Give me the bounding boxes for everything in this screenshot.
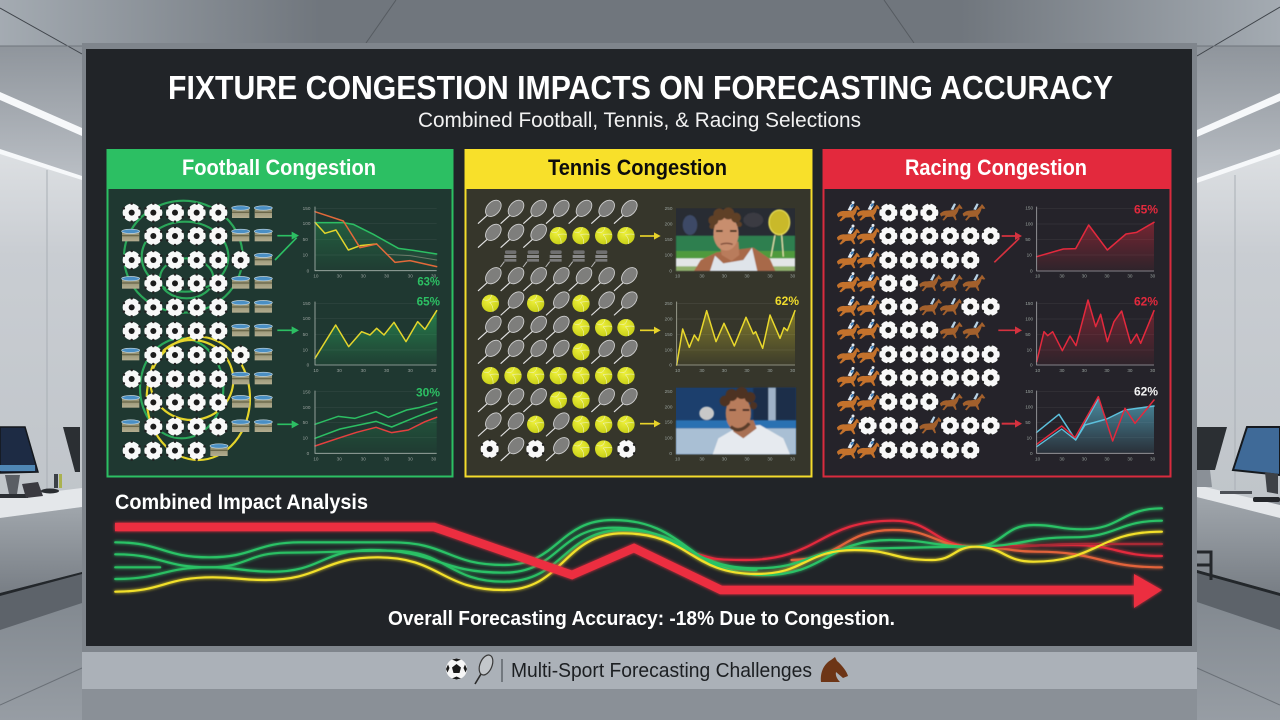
- tennis axis labels 1: 30: [767, 274, 773, 279]
- football area chart 2: 30: [361, 368, 366, 373]
- football area chart 2: 30: [337, 368, 342, 373]
- football area chart 2: 100: [303, 316, 311, 321]
- red decline arrow: [115, 527, 1162, 608]
- racing chart 1: 30: [1104, 274, 1110, 279]
- tennis icon grid: [478, 197, 640, 461]
- football line chart 3: 10: [313, 456, 319, 461]
- racing chart 2: 150: [1025, 301, 1034, 306]
- tennis area chart: 200: [665, 317, 673, 322]
- racing chart 3: 150: [1025, 389, 1034, 394]
- football line chart 1: 30: [384, 274, 390, 279]
- racing chart 1: 10: [1035, 274, 1041, 279]
- tennis axis labels 2: 100: [665, 435, 673, 440]
- bottom footer strip: [82, 652, 1197, 689]
- tennis axis labels 1: 30: [790, 274, 796, 279]
- football line chart 1: 50: [303, 237, 308, 242]
- panel: racing congestion: [823, 149, 1171, 476]
- tennis axis labels 2: 30: [699, 456, 705, 461]
- racing chart 3: 100: [1025, 405, 1034, 410]
- racing chart 2: 0: [1030, 363, 1033, 368]
- tennis area chart: 100: [665, 348, 673, 353]
- racing chart 1: 50: [1025, 237, 1031, 242]
- racing chart 2: 10: [1035, 368, 1041, 373]
- racing chart 2: 30: [1104, 368, 1110, 373]
- tennis axis labels 2: 10: [675, 456, 681, 461]
- tennis axis labels 2: 30: [722, 456, 727, 461]
- racing chart 3: 10: [1035, 456, 1041, 461]
- combined impact wave chart: [115, 508, 1162, 592]
- tennis axis labels 1: 250: [665, 206, 673, 211]
- football line chart 3: 30: [361, 456, 366, 461]
- racing chart 1: 65%: [1134, 202, 1158, 216]
- football area chart 2: 10: [313, 368, 319, 373]
- tennis axis labels 1: 10: [675, 274, 681, 279]
- football area chart 2: 65%: [417, 294, 440, 308]
- tennis axis labels 2: 30: [744, 456, 750, 461]
- racing chart 1: 10: [1027, 253, 1032, 258]
- football line chart 1: 0: [307, 268, 310, 273]
- tennis area chart: 30: [722, 368, 727, 373]
- racing chart 3: 50: [1025, 420, 1031, 425]
- tennis area chart: 30: [790, 368, 796, 373]
- tennis area chart: 30: [699, 368, 705, 373]
- tennis axis labels 1: [665, 206, 796, 279]
- racing chart 1: 30: [1127, 274, 1133, 279]
- tennis axis labels 1: 30: [744, 274, 750, 279]
- icon: football: [446, 658, 467, 680]
- racing chart 3: 30: [1104, 456, 1110, 461]
- icon: racket: [475, 653, 495, 684]
- football line chart 1: 100: [303, 221, 311, 226]
- footer: [446, 653, 848, 684]
- racing panel heading: [823, 149, 1171, 189]
- racing chart 2: 30: [1127, 368, 1133, 373]
- football line chart 1: [303, 206, 440, 288]
- racing chart 2: 30: [1150, 368, 1156, 373]
- racing panel heading: Racing Congestion: [905, 155, 1087, 180]
- overall accuracy callout: Overall Forecasting Accuracy: -18% Due to Congestion.: [388, 608, 895, 630]
- display board dark screen: [86, 49, 1192, 646]
- racing chart 2: 10: [1027, 348, 1032, 353]
- subtitle: Combined Football, Tennis, & Racing Selections: [418, 109, 861, 132]
- racing chart 2: 30: [1082, 368, 1087, 373]
- football line chart 1: 10: [313, 274, 319, 279]
- football line chart 3: 10: [303, 435, 308, 440]
- tennis axis labels 1: 150: [665, 237, 673, 242]
- tennis axis labels 2: 30: [790, 456, 796, 461]
- racing chart 3: 30: [1082, 456, 1087, 461]
- football line chart 1: 30: [408, 274, 413, 279]
- racing chart 1: 150: [1025, 206, 1034, 211]
- tennis area chart: 10: [675, 368, 681, 373]
- football line chart 3: 100: [303, 405, 311, 410]
- football area chart 2: 10: [303, 348, 308, 353]
- racing chart 3: 0: [1030, 451, 1033, 456]
- footer text: Multi-Sport Forecasting Challenges: [511, 660, 812, 682]
- tennis axis labels 1: 30: [699, 274, 705, 279]
- tennis panel heading: [465, 149, 812, 189]
- racing chart 1: 30: [1150, 274, 1156, 279]
- football line chart 1: 30: [337, 274, 342, 279]
- football line chart 3: 30: [337, 456, 342, 461]
- football line chart 1: 30: [361, 274, 366, 279]
- panel: football congestion: [107, 149, 453, 476]
- racing chart 3: 30: [1127, 456, 1133, 461]
- racing chart 2: 100: [1025, 317, 1034, 322]
- tennis axis labels 2: [665, 389, 796, 461]
- tennis axis labels 2: 0: [669, 451, 672, 456]
- football line chart 3: 150: [303, 389, 311, 394]
- tennis axis labels 1: 30: [722, 274, 727, 279]
- tennis area chart: 250: [665, 301, 673, 306]
- football area chart 2: 30: [408, 368, 413, 373]
- football line chart 3: 30%: [416, 385, 440, 399]
- football icon grid with congestion loops: [122, 201, 272, 461]
- racing chart 3: 30: [1150, 456, 1156, 461]
- tennis axis labels 1: 200: [665, 222, 673, 227]
- tennis player photo 1: [676, 207, 795, 271]
- tennis axis labels 2: 30: [767, 456, 773, 461]
- football line chart 3: 0: [307, 451, 310, 456]
- racing chart 2: 62%: [1134, 294, 1158, 308]
- title: FIXTURE CONGESTION IMPACTS ON FORECASTING ACCURACY: [168, 70, 1113, 107]
- football area chart 2: [303, 294, 440, 373]
- football arrows: [275, 232, 299, 428]
- racing chart 1: 30: [1059, 274, 1065, 279]
- tennis axis labels 1: 100: [665, 253, 673, 258]
- football line chart 3: 50: [303, 420, 308, 425]
- tennis area chart: 62%: [775, 294, 799, 308]
- football line chart 3: 30: [431, 456, 437, 461]
- racing chart 1: 30: [1082, 274, 1087, 279]
- tennis axis labels 2: 150: [665, 420, 673, 425]
- football area chart 2: 50: [303, 332, 308, 337]
- tennis area chart: 0: [669, 363, 672, 368]
- football area chart 2: 30: [431, 368, 437, 373]
- football line chart 1: 63%: [417, 274, 440, 288]
- tennis area chart: [665, 294, 799, 373]
- football line chart 3: 30: [408, 456, 413, 461]
- tennis area chart: 30: [744, 368, 750, 373]
- football line chart 1: 150: [303, 206, 311, 211]
- racing chart 2: [1025, 294, 1158, 373]
- racing icon grid: [837, 200, 1000, 460]
- racing chart 1: 100: [1025, 221, 1034, 226]
- football panel heading: Football Congestion: [182, 155, 376, 180]
- tennis arrows: [640, 232, 661, 427]
- football line chart 3: [303, 385, 440, 461]
- panel: tennis congestion: [465, 149, 812, 476]
- racing chart 3: 62%: [1134, 385, 1158, 399]
- racing arrows: [994, 232, 1022, 428]
- racing chart 3: 10: [1027, 435, 1032, 440]
- racing chart 3: [1025, 385, 1158, 461]
- tennis axis labels 1: 0: [669, 268, 672, 273]
- tennis axis labels 2: 250: [665, 389, 673, 394]
- tennis axis labels 2: 200: [665, 404, 673, 409]
- racing chart 1: 0: [1030, 268, 1033, 273]
- tennis player photo 2: [676, 387, 796, 454]
- tennis area chart: 150: [665, 332, 673, 337]
- tennis area chart: 30: [767, 368, 773, 373]
- racing chart 2: 50: [1025, 332, 1031, 337]
- football line chart 3: 30: [384, 456, 390, 461]
- tennis panel heading: Tennis Congestion: [548, 155, 727, 180]
- football area chart 2: 30: [384, 368, 390, 373]
- football panel heading: [107, 149, 453, 189]
- football line chart 1: 10: [303, 253, 308, 258]
- football area chart 2: 150: [303, 301, 311, 306]
- football area chart 2: 0: [307, 363, 310, 368]
- racing chart 2: 30: [1059, 368, 1065, 373]
- racing chart 3: 30: [1059, 456, 1065, 461]
- football line chart 1: 30: [431, 274, 437, 279]
- racing chart 1: [1025, 202, 1158, 279]
- icon: horse head: [821, 657, 848, 682]
- combined impact heading: Combined Impact Analysis: [115, 491, 368, 514]
- display board frame: [82, 43, 1197, 653]
